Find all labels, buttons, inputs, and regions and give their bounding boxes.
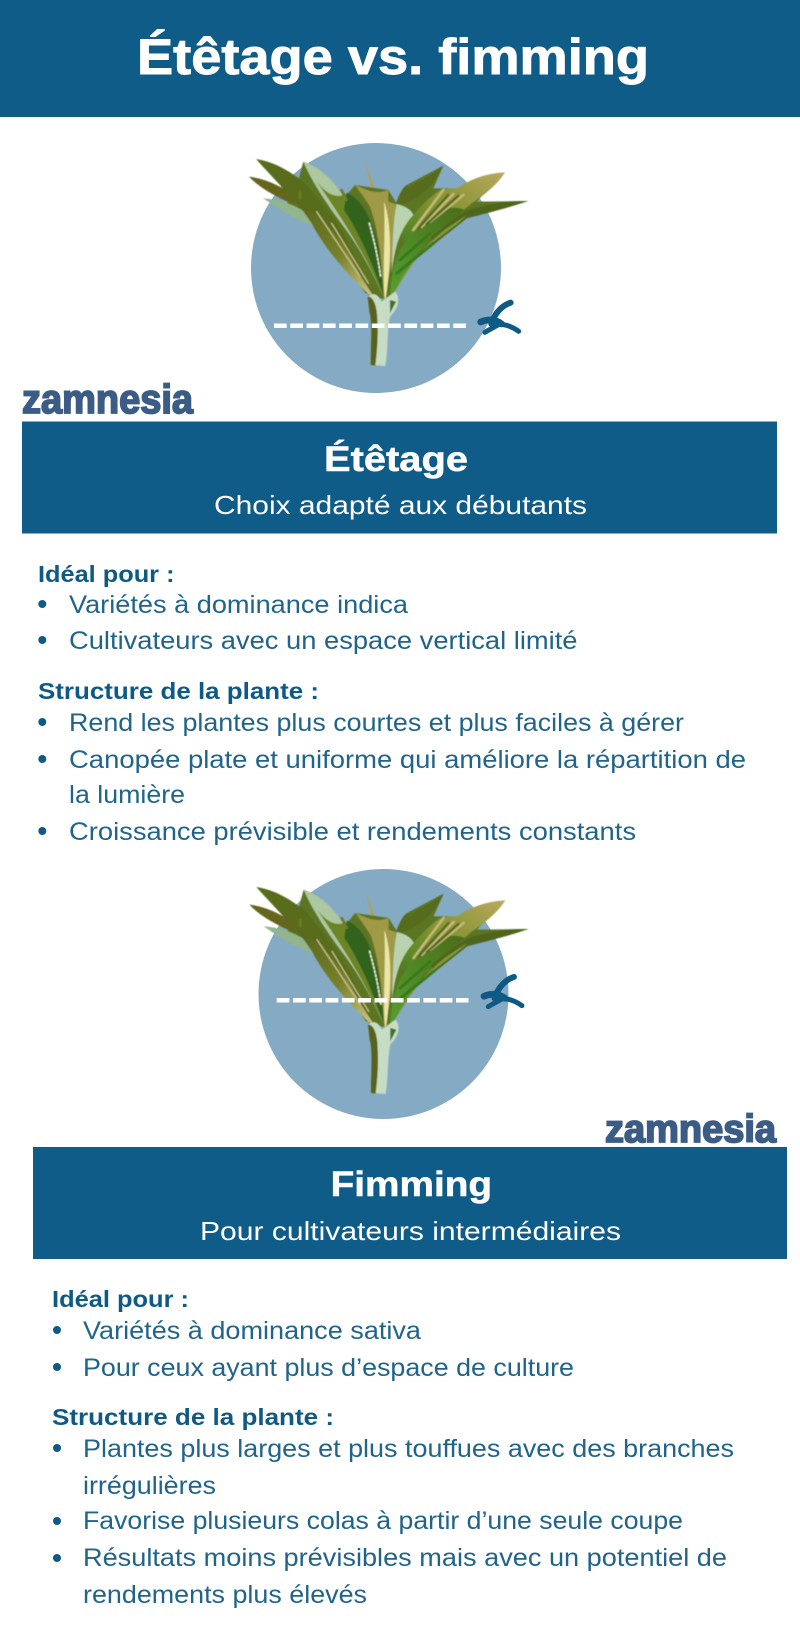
text block: Fimming plant structure xyxy=(52,1404,734,1609)
illustration: topping plant xyxy=(249,143,528,393)
label: Idéal pour : xyxy=(52,1286,189,1312)
panel: Fimming header xyxy=(33,1147,787,1259)
text block: Étêtage ideal for: Variétés à dominance indica xyxy=(69,591,408,619)
panel: Étêtage header xyxy=(22,422,777,534)
text block: Étêtage plant structure xyxy=(38,678,746,846)
cut line xyxy=(277,998,468,1003)
icon: pruning shears xyxy=(481,303,519,332)
label: Idéal pour : xyxy=(38,561,174,587)
label: Structure de la plante : xyxy=(38,678,319,704)
text block: Fimming plant structure: irrégulières xyxy=(83,1472,216,1500)
text block: Étêtage plant structure: la lumière xyxy=(69,781,185,809)
illustration: fimming plant xyxy=(249,869,529,1119)
text block: Étêtage plant structure: Canopée plate et uniforme qui améliore la répartition de xyxy=(69,746,746,774)
text block: Fimming ideal for: Variétés à dominance sativa xyxy=(83,1317,421,1345)
text block: Fimming plant structure: rendements plus élevés xyxy=(83,1581,367,1609)
heading: Fimming xyxy=(331,1165,492,1204)
text block: Fimming ideal for xyxy=(52,1286,574,1382)
subheading: Choix adapté aux débutants xyxy=(214,490,587,520)
text block: Étêtage ideal for: Cultivateurs avec un espace vertical limité xyxy=(69,627,578,655)
subheading: Pour cultivateurs intermédiaires xyxy=(200,1216,621,1246)
text block: Fimming plant structure: Favorise plusieurs colas à partir d’une seule coupe xyxy=(83,1507,683,1535)
plant cutting xyxy=(249,887,529,1094)
circle backdrop xyxy=(251,143,501,393)
label: Structure de la plante : xyxy=(52,1404,334,1430)
text block: Fimming ideal for: Pour ceux ayant plus d’espace de culture xyxy=(83,1354,574,1382)
text block: Étêtage plant structure: Croissance prévisible et rendements constants xyxy=(69,818,636,846)
heading: Étêtage xyxy=(324,439,468,479)
title banner xyxy=(0,0,800,117)
text block: Étêtage plant structure: Rend les plantes plus courtes et plus faciles à gérer xyxy=(69,709,684,737)
text block: Fimming plant structure: Résultats moins prévisibles mais avec un potentiel de xyxy=(83,1544,727,1572)
plant cutting xyxy=(249,159,528,366)
text block: Fimming plant structure: Plantes plus larges et plus touffues avec des branches xyxy=(83,1435,734,1463)
icon: pruning shears xyxy=(484,977,522,1007)
circle backdrop xyxy=(258,869,508,1119)
title: Étêtage vs. fimming xyxy=(137,29,649,85)
logo: zamnesia: zamnesia xyxy=(605,1108,776,1151)
cut line xyxy=(274,323,466,328)
text block: Étêtage ideal for xyxy=(38,561,578,655)
logo: zamnesia: zamnesia xyxy=(22,376,194,422)
